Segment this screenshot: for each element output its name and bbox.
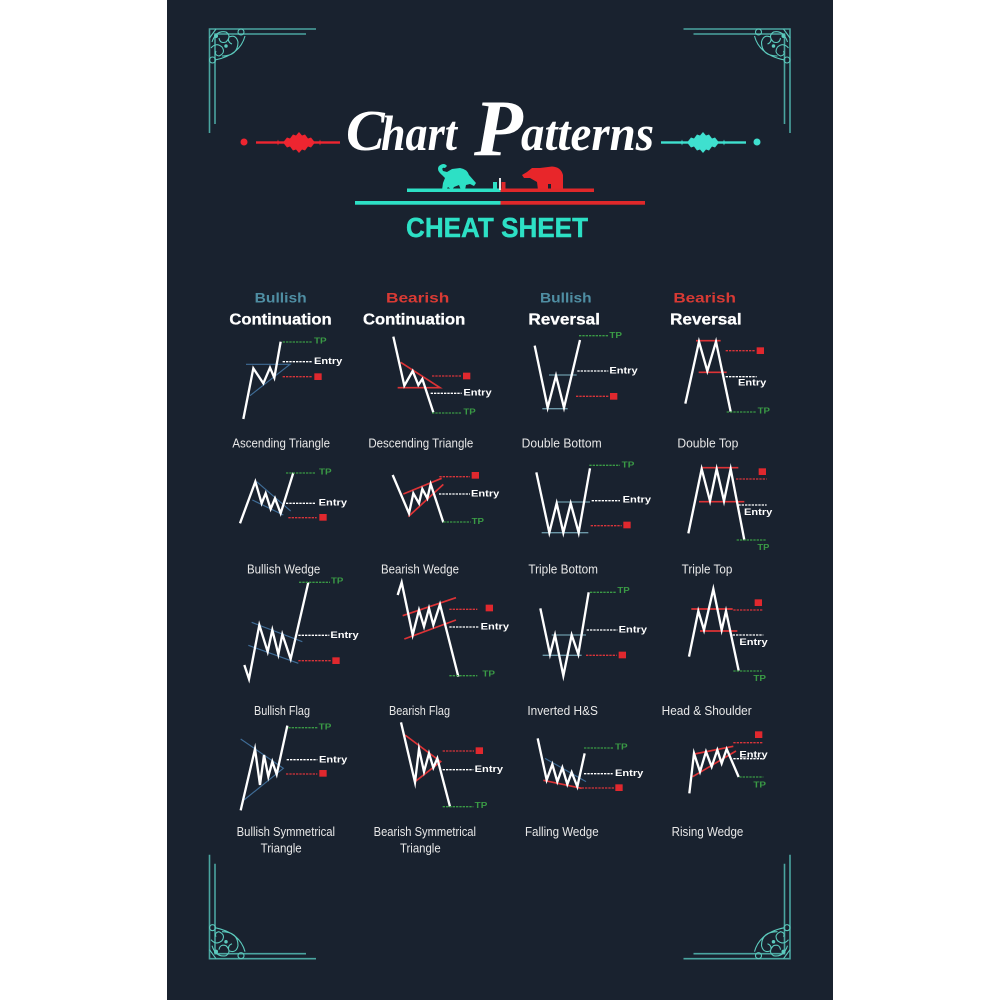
corner frame: top right: [684, 29, 790, 133]
title: Chart Patterns: hart: [381, 105, 459, 161]
pattern: Triple Bottom: TP: [622, 460, 635, 469]
pattern: Bearish Wedge: Bearish Wedge: [381, 562, 459, 577]
pattern: Head & Shoulder: TP: [753, 674, 767, 683]
pattern: Ascending Triangle: Entry: [314, 356, 342, 366]
heading: Bearish Continuation: Continuation: [363, 311, 465, 328]
pattern: Inverted H&S: Inverted H&S: [527, 703, 598, 718]
corner frame: bottom left: [210, 855, 316, 959]
pattern: Bearish Symmetrical Triangle: Triangle: [400, 841, 441, 856]
pattern: Inverted H&S: Entry: [619, 624, 647, 634]
pattern: Descending Triangle: Entry: [463, 388, 492, 398]
pattern: Triple Bottom: Triple Bottom: [528, 562, 598, 577]
pattern: Falling Wedge: TP: [615, 742, 629, 751]
market bars and candles: [355, 178, 645, 205]
heading: Bearish Reversal: Bearish: [673, 289, 736, 305]
pattern: Bullish Flag: Bullish Flag: [254, 703, 310, 718]
pattern: Bullish Flag: TP: [331, 577, 344, 586]
pattern: Descending Triangle: TP: [463, 408, 476, 417]
pattern: Bullish Symmetrical Triangle: Bullish Symmetrical: [237, 824, 335, 839]
pattern: Double Bottom: Entry: [609, 366, 638, 376]
corner frame: top left: [210, 29, 316, 133]
pattern: Bearish Flag: Entry: [481, 621, 509, 631]
heading: Bullish Continuation: Continuation: [229, 311, 332, 328]
heading: Bearish Reversal: [670, 289, 742, 328]
pattern: Bullish Flag: Entry: [330, 630, 359, 640]
pattern: Double Bottom: TP: [609, 331, 623, 340]
pattern: Double Bottom: [522, 331, 638, 450]
pattern: Double Bottom: Double Bottom: [522, 435, 602, 450]
pattern: Bullish Wedge: [240, 468, 347, 577]
pattern: Double Top: Entry: [738, 378, 766, 388]
title: Chart Patterns: atterns: [521, 105, 654, 161]
icon: bull: [438, 164, 476, 190]
pattern: Bearish Wedge: TP: [472, 517, 485, 526]
pattern: Triple Top: Entry: [744, 507, 772, 517]
heading: Bullish Reversal: Reversal: [528, 311, 600, 328]
pattern: Falling Wedge: Entry: [615, 768, 643, 778]
pattern: Double Top: TP: [758, 406, 771, 415]
heading: Bearish Continuation: Bearish: [386, 289, 449, 305]
pattern: Falling Wedge: [525, 738, 643, 839]
pattern: Bearish Symmetrical Triangle: Bearish Symmetrical: [374, 824, 476, 839]
divider ornament: red left: [240, 132, 340, 153]
pattern: Descending Triangle: [368, 337, 492, 450]
pattern: Double Top: [677, 341, 771, 450]
pattern: Triple Top: TP: [757, 543, 770, 552]
pattern: Ascending Triangle: Ascending Triangle: [232, 435, 330, 450]
pattern: Rising Wedge: Entry: [739, 749, 768, 759]
pattern: Bearish Wedge: Entry: [471, 488, 499, 498]
pattern: Bearish Flag: Bearish Flag: [389, 703, 450, 718]
pattern: Double Top: Double Top: [677, 435, 738, 450]
pattern: Triple Top: Triple Top: [682, 562, 732, 577]
heading: Bearish Reversal: Reversal: [670, 311, 742, 328]
pattern: Bearish Symmetrical Triangle: TP: [475, 801, 488, 810]
pattern: Falling Wedge: Falling Wedge: [525, 824, 599, 839]
pattern: Rising Wedge: TP: [753, 780, 767, 789]
pattern: Bullish Wedge: Entry: [319, 498, 347, 508]
pattern: Bullish Flag: [244, 577, 359, 718]
poster background: [167, 0, 833, 1000]
subtitle: Cheat Sheet: CHEAT SHEET: [406, 212, 588, 243]
heading: Bullish Continuation: Bullish: [255, 289, 307, 305]
pattern: Triple Bottom: Entry: [623, 495, 651, 505]
corner frame: bottom right: [684, 855, 790, 959]
icon: bear: [522, 166, 563, 190]
pattern: Bearish Symmetrical Triangle: Entry: [475, 764, 503, 774]
pattern: Bearish Flag: TP: [482, 669, 496, 678]
pattern: Bearish Wedge: [381, 472, 499, 577]
pattern: Bearish Flag: [389, 582, 509, 718]
pattern: Bullish Symmetrical Triangle: Entry: [319, 754, 347, 764]
pattern: Bearish Symmetrical Triangle: [374, 722, 503, 856]
pattern: Bullish Wedge: Bullish Wedge: [247, 562, 320, 577]
heading: Bullish Reversal: Bullish: [540, 289, 592, 305]
pattern: Rising Wedge: Rising Wedge: [672, 824, 743, 839]
pattern: Rising Wedge: [672, 731, 768, 839]
pattern: Descending Triangle: Descending Triangle: [368, 435, 473, 450]
pattern: Ascending Triangle: TP: [314, 337, 328, 346]
heading: Bearish Continuation: [363, 289, 465, 328]
pattern: Bullish Symmetrical Triangle: Triangle: [261, 841, 302, 856]
pattern: Triple Bottom: [528, 460, 651, 577]
heading: Bullish Reversal: [528, 289, 600, 328]
pattern: Head & Shoulder: [662, 589, 768, 718]
pattern: Head & Shoulder: Head & Shoulder: [662, 703, 752, 718]
pattern: Triple Top: [682, 468, 772, 577]
title: Chart Patterns: C: [346, 98, 386, 163]
pattern: Head & Shoulder: Entry: [739, 637, 768, 647]
pattern: Bullish Symmetrical Triangle: [237, 723, 347, 856]
divider ornament: teal right: [661, 132, 760, 153]
pattern: Bullish Symmetrical Triangle: TP: [319, 723, 332, 732]
column headings: [229, 289, 742, 328]
heading: Bullish Continuation: [229, 289, 332, 328]
pattern: Inverted H&S: TP: [617, 586, 630, 595]
pattern: Inverted H&S: [527, 586, 647, 718]
pattern: Bullish Wedge: TP: [319, 468, 333, 477]
title: Chart Patterns: P: [473, 85, 524, 173]
pattern: Ascending Triangle: [232, 337, 342, 450]
